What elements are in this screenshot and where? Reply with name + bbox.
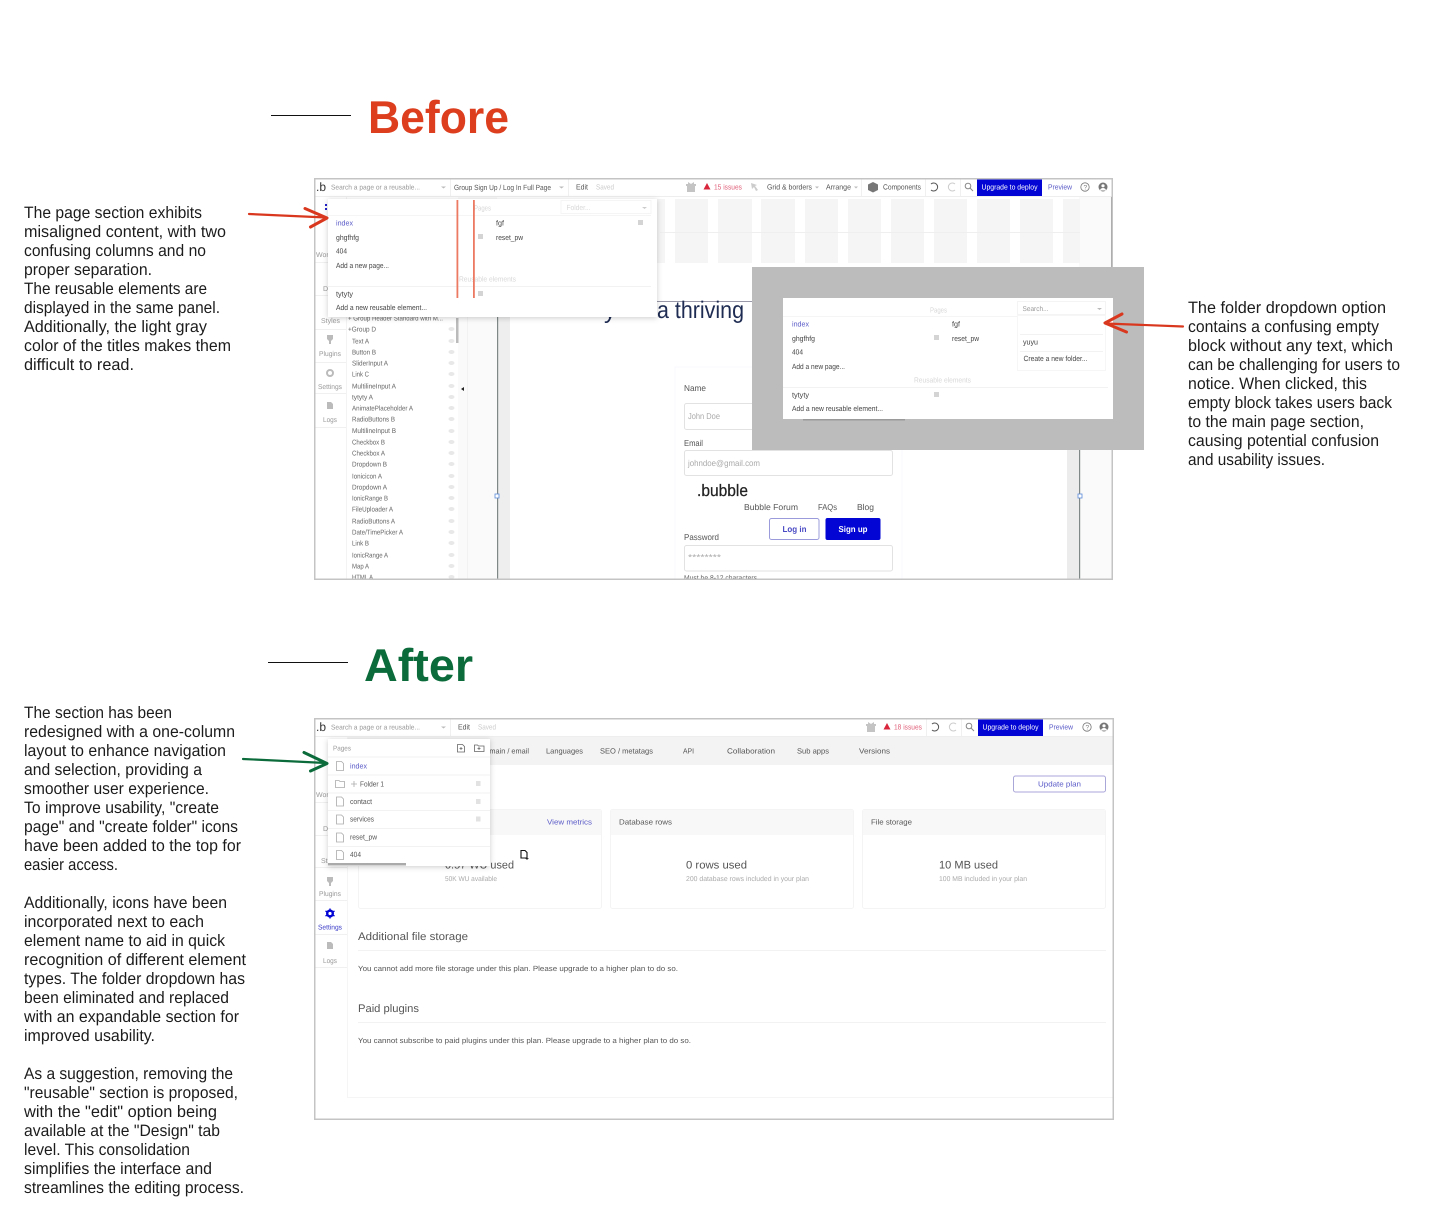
panel: gray overlay with folder dropdown screenshot: Reusable elements — [914, 376, 971, 384]
panel: before editor screenshot — [314, 178, 1113, 587]
layers list — [347, 300, 458, 582]
arrow: red pointing at pages dropdown — [249, 208, 327, 227]
section: additional file storage: Additional file storage — [358, 931, 468, 943]
arrow: red pointing at folder dropdown — [1105, 314, 1183, 332]
panel: gray overlay with folder dropdown screenshot: tytyty — [792, 390, 809, 400]
top toolbar: Edit — [458, 722, 471, 732]
text block: before left description: color of the titles makes them — [24, 337, 231, 355]
signup form card: .bubble — [697, 482, 748, 500]
text block: before right description: can be challenging for users to — [1188, 356, 1400, 374]
card: workload usage: View metrics — [547, 818, 592, 826]
text block: before left description: Additionally, the light gray — [24, 318, 208, 336]
text block: after left description: easier access. — [24, 856, 118, 874]
text block: before left description: difficult to read. — [24, 356, 134, 374]
signup form card: Email — [684, 438, 703, 448]
signup form card: Sign up — [838, 524, 868, 534]
top toolbar: Search a page or a reusable... — [331, 724, 420, 732]
layers list: RadioButtons A — [352, 518, 395, 526]
top toolbar: Preview — [1048, 182, 1073, 192]
top toolbar: Edit — [576, 182, 589, 192]
text block: after left description: have been added to the top for — [24, 837, 241, 855]
panel: gray overlay with folder dropdown screenshot: 404 — [792, 348, 803, 356]
top toolbar: Upgrade to deploy — [982, 722, 1039, 732]
left sidebar: Plugins — [319, 350, 341, 358]
pages dropdown popup: 404 — [336, 246, 347, 256]
layers list: Ionicicon A — [352, 472, 382, 480]
layers list: RadioButtons B — [352, 416, 395, 424]
button: update plan: Update plan — [1038, 780, 1081, 788]
section: additional file storage — [358, 931, 1106, 973]
pages dropdown popup: index — [336, 218, 353, 228]
pages popup redesigned — [328, 739, 490, 866]
tab bar: Sub apps — [797, 746, 829, 756]
card: database rows: 200 database rows included in your plan — [686, 875, 809, 883]
left sidebar: Settings — [318, 383, 342, 391]
left sidebar — [315, 737, 348, 1097]
layers list: SliderInput A — [352, 360, 388, 368]
card: file storage: 100 MB included in your plan — [939, 875, 1027, 883]
tab bar: API — [683, 746, 694, 756]
top toolbar: Components — [883, 182, 921, 192]
signup form card: Password — [684, 532, 719, 542]
pages dropdown popup: Folder... — [566, 203, 590, 212]
text block: before right description: and usability issues. — [1188, 451, 1325, 469]
top toolbar: Arrange — [826, 182, 851, 192]
signup form card: Bubble Forum — [744, 502, 798, 512]
pages dropdown popup: ghgfhfg — [336, 233, 359, 242]
layers list: Date/TimePicker A — [352, 528, 403, 536]
text block: after left description: element name to aid in quick — [24, 932, 226, 950]
text block: before left description — [24, 204, 231, 374]
text block: after left description — [23, 704, 246, 1197]
pages dropdown popup — [328, 199, 657, 317]
left sidebar: Logs — [323, 417, 337, 424]
row: folder 1 — [335, 780, 480, 788]
text block: before right description: causing potential confusion — [1188, 432, 1379, 450]
text block: after left description: recognition of different element — [24, 951, 246, 969]
signup form card: Name — [684, 383, 706, 393]
text block: after left description: incorporated next to each — [24, 913, 204, 931]
text block: after left description: types. The folder dropdown has — [24, 970, 245, 988]
top toolbar: .b — [316, 720, 326, 734]
row: 404: 404 — [350, 850, 361, 859]
pages dropdown popup: Add a new page... — [336, 261, 389, 270]
panel: gray overlay with folder dropdown screenshot: fgf — [952, 320, 961, 328]
layers list: AnimatePlaceholder A — [352, 404, 413, 412]
canvas guide lines — [494, 317, 1082, 578]
card: workload usage: 50K WU available — [445, 875, 497, 883]
folder dropdown list — [1018, 316, 1106, 370]
top toolbar — [315, 179, 1112, 196]
text block: after left description: streamlines the editing process. — [24, 1179, 244, 1197]
tab bar — [348, 737, 1113, 765]
text block: before right description: empty block takes users back — [1188, 394, 1393, 412]
text block: after left description: redesigned with a one-column — [24, 723, 235, 741]
section: paid plugins — [358, 1003, 1106, 1045]
panel: gray overlay with folder dropdown screenshot: Pages — [930, 306, 947, 314]
row: index — [336, 762, 367, 770]
row: reset_pw — [336, 832, 378, 842]
text block: after left description: Additionally, icons have been — [24, 894, 227, 912]
text block: after left description: To improve usability, "create — [24, 799, 219, 817]
card: file storage — [862, 810, 1106, 908]
panel: gray overlay with folder dropdown screenshot: reset_pw — [952, 334, 980, 343]
layers list: Map A — [352, 564, 369, 570]
layers list: IonicRange B — [352, 494, 388, 502]
top toolbar — [315, 719, 1113, 736]
signup form card: John Doe — [688, 411, 720, 421]
heading: After: After — [364, 639, 473, 691]
top toolbar: Group Sign Up / Log In Full Page — [454, 183, 551, 192]
top toolbar: Preview — [1049, 722, 1074, 732]
text block: after left description: and selection, providing a — [24, 761, 203, 779]
layers list: Link C — [352, 370, 369, 378]
folder dropdown list: Create a new folder... — [1024, 354, 1088, 363]
text block: before right description: notice. When clicked, this — [1188, 375, 1367, 393]
signup form card: FAQs — [818, 502, 837, 512]
row: reset_pw: reset_pw — [350, 832, 378, 842]
pages dropdown popup: Pages — [474, 204, 491, 212]
pages dropdown popup: Reusable elements — [459, 274, 516, 284]
layers list: MultilineInput A — [352, 382, 396, 390]
left sidebar: D — [323, 286, 328, 293]
top toolbar: Saved — [478, 722, 496, 732]
card: file storage: File storage — [871, 818, 912, 826]
row: 404 — [336, 850, 361, 860]
top toolbar: 18 issues — [894, 722, 922, 732]
left sidebar: Wor — [316, 792, 329, 799]
left sidebar — [315, 197, 347, 579]
icon: create page — [458, 744, 464, 752]
left sidebar: D — [323, 826, 328, 833]
card: workload usage: 0.57 WU used — [445, 860, 514, 872]
top toolbar: Upgrade to deploy — [982, 182, 1038, 192]
icon: cursor — [521, 850, 528, 860]
text block: after left description: level. This consolidation — [24, 1141, 190, 1159]
top toolbar: 15 issues — [714, 182, 742, 192]
layers list: Checkbox B — [352, 438, 385, 446]
card: workload usage — [358, 810, 602, 908]
left sidebar: Settings — [318, 924, 342, 932]
pages dropdown popup: fgf — [496, 218, 505, 228]
row: index: index — [350, 762, 367, 770]
left sidebar: Styles — [321, 317, 340, 325]
tab bar: Versions — [859, 746, 890, 756]
left sidebar: Logs — [323, 958, 337, 965]
icon: create folder — [474, 745, 484, 752]
tab bar: Domain / email — [480, 746, 529, 756]
text block: after left description: The section has been — [24, 704, 172, 722]
tab bar: Languages — [546, 746, 583, 756]
text block: before left description: proper separation. — [24, 261, 152, 279]
panel: gray overlay with folder dropdown screenshot — [752, 267, 1144, 450]
layers list: Button B — [352, 350, 376, 356]
panel: gray overlay with folder dropdown screenshot: ghgfhfg — [792, 334, 815, 343]
folder dropdown list: yuyu — [1023, 338, 1038, 346]
signup form card — [684, 385, 893, 578]
text block: after left description: page" and "create folder" icons — [24, 818, 238, 836]
layers list: + Group Header Standard with M... — [348, 314, 443, 322]
tab bar: Collaboration — [727, 746, 775, 756]
section: paid plugins: You cannot subscribe to paid plugins under this plan. Please upgrade to a higher plan to do so. — [358, 1036, 691, 1045]
section: paid plugins: Paid plugins — [358, 1003, 420, 1015]
icon: settings gear — [326, 908, 334, 918]
text block: before left description: displayed in the same panel. — [24, 299, 220, 317]
text block: before left description: The reusable elements are — [24, 280, 207, 298]
text block: after left description: layout to enhance navigation — [24, 742, 226, 760]
text block: after left description: improved usability. — [24, 1027, 155, 1045]
text block: after left description: simplifies the interface and — [24, 1160, 212, 1178]
panel: gray overlay with folder dropdown screenshot: Add a new reusable element... — [792, 404, 883, 413]
top toolbar: Saved — [596, 182, 614, 192]
row: services — [336, 814, 480, 824]
grid columns — [632, 199, 1080, 263]
row: contact: contact — [350, 797, 373, 806]
card: database rows: 0 rows used — [686, 860, 747, 872]
panel: gray overlay with folder dropdown screenshot: Add a new page... — [792, 362, 845, 371]
row: folder 1: Folder 1 — [360, 780, 384, 788]
layers list: HTML A — [352, 574, 373, 582]
card: database rows: Database rows — [619, 818, 672, 826]
text block: after left description: with the "edit" option being — [23, 1103, 217, 1121]
layers list: FileUploader A — [352, 506, 393, 514]
layers list: MultilineInput B — [352, 427, 396, 435]
text block: before right description: block without any text, which — [1188, 337, 1393, 355]
text block: after left description: available at the "Design" tab — [24, 1122, 220, 1140]
layers list: Text A — [352, 338, 369, 346]
top toolbar: Grid & borders — [767, 182, 812, 192]
top toolbar: .b — [316, 180, 326, 194]
pages popup redesigned: Pages — [333, 746, 351, 752]
text block: before right description: contains a confusing empty — [1188, 318, 1380, 336]
panel: gray overlay with folder dropdown screenshot: index — [792, 320, 809, 328]
row: contact — [336, 797, 480, 806]
signup form card: johndoe@gmail.com — [687, 458, 760, 468]
signup form card: Must be 8-12 characters — [684, 574, 757, 582]
tab bar: SEO / metatags — [600, 746, 653, 756]
pages dropdown popup: Add a new reusable element... — [336, 303, 427, 312]
pages dropdown popup: tytyty — [336, 290, 353, 298]
layers list: IonicRange A — [352, 552, 388, 560]
pages dropdown popup: reset_pw — [496, 233, 524, 242]
layers list: Dropdown B — [352, 460, 387, 468]
top toolbar: ? — [1086, 724, 1090, 732]
row: services: services — [350, 814, 374, 824]
text block: after left description: "reusable" section is proposed, — [24, 1084, 238, 1102]
text block: after left description: As a suggestion, removing the — [24, 1065, 233, 1083]
left sidebar: Wor — [316, 252, 329, 259]
card: database rows — [610, 810, 854, 908]
arrow: green pointing at pages popup — [243, 752, 327, 771]
signup form card: Log in — [782, 524, 806, 534]
text block: before right description — [1188, 299, 1400, 469]
signup form card: Blog — [857, 502, 874, 512]
top toolbar: Search a page or a reusable... — [331, 184, 420, 192]
layers list: Link B — [352, 540, 369, 548]
layers list: +Group D — [348, 326, 376, 334]
button: update plan — [1014, 776, 1106, 792]
text block: before left description: confusing columns and no — [24, 242, 206, 260]
canvas heading text: a thriving — [657, 297, 744, 324]
panel: gray overlay with folder dropdown screenshot: Search... — [1022, 305, 1049, 313]
text block: before right description: to the main page section, — [1188, 413, 1364, 431]
text block: before right description: The folder dropdown option — [1188, 299, 1386, 317]
left sidebar: St — [321, 858, 328, 865]
text block: before left description: The page section exhibits — [24, 204, 202, 222]
canvas heading text: y — [604, 297, 616, 324]
text block: after left description: with an expandable section for — [23, 1008, 239, 1026]
text block: after left description: been eliminated and replaced — [24, 989, 229, 1007]
layers list: Checkbox A — [352, 450, 385, 458]
layers list: tytyty A — [352, 394, 373, 402]
signup form card: ******** — [688, 552, 722, 562]
text block: after left description: smoother user experience. — [24, 780, 209, 798]
panel: after editor screenshot — [314, 718, 1114, 1120]
top toolbar: ? — [1084, 184, 1088, 192]
card: file storage: 10 MB used — [939, 860, 998, 872]
canvas heading text — [604, 300, 743, 323]
section: additional file storage: You cannot add more file storage under this plan. Please upgrade to a higher plan to do so. — [358, 964, 678, 973]
text block: before left description: misaligned content, with two — [24, 223, 226, 241]
heading: Before: Before — [368, 91, 509, 143]
layers list: Dropdown A — [352, 484, 387, 492]
canvas background — [458, 197, 1112, 579]
left sidebar: Plugins — [319, 890, 341, 898]
